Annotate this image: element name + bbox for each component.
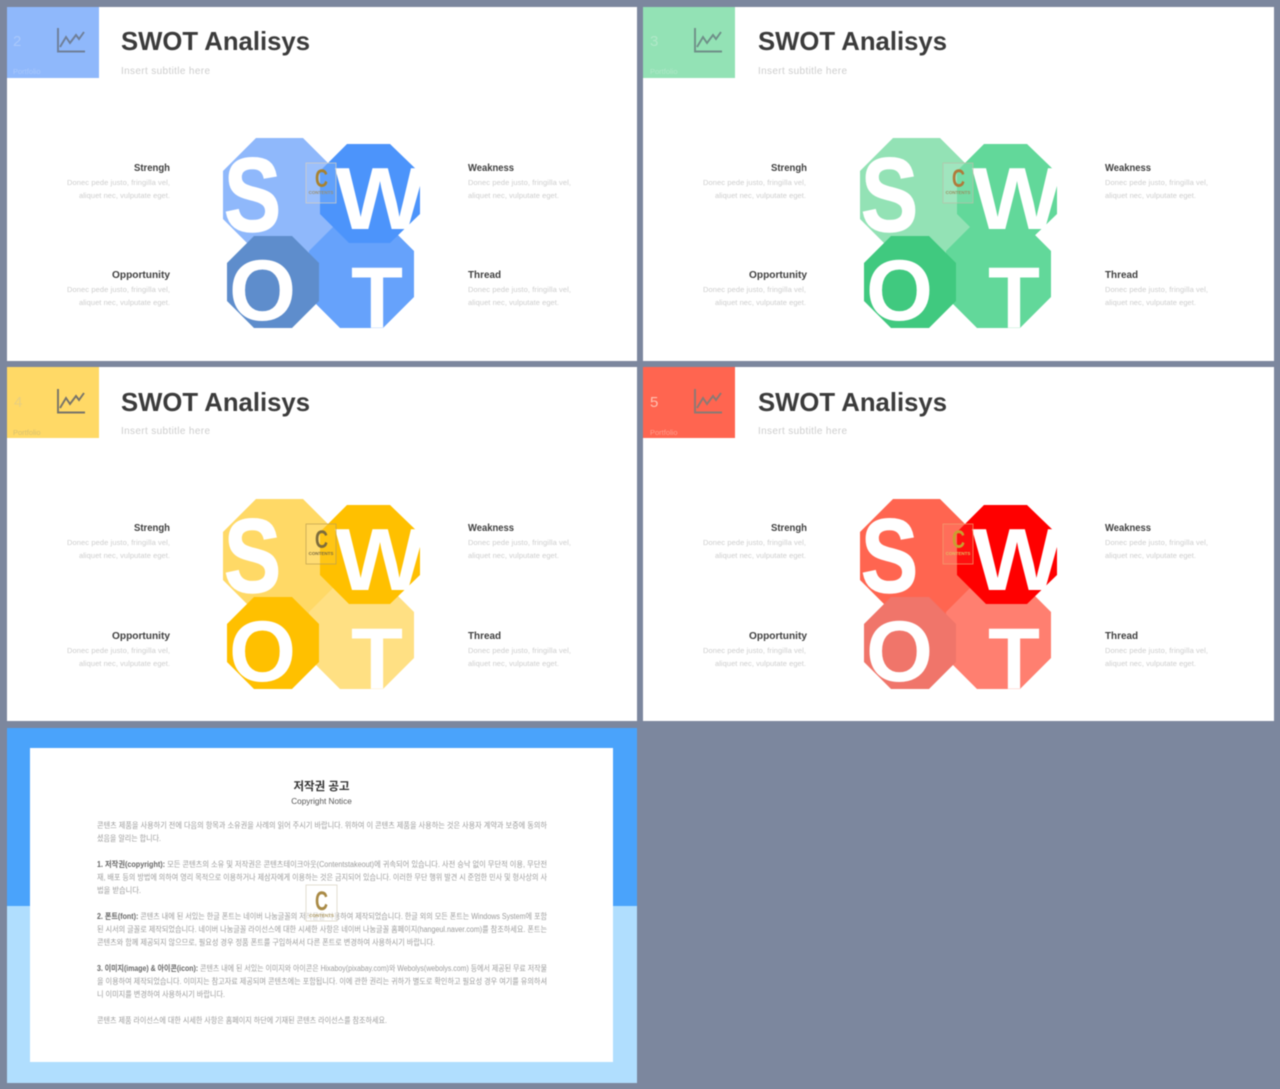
watermark logo: C — [952, 526, 965, 554]
diagram: SWOT octagons: O — [229, 243, 296, 339]
watermark logo: CONTENTS — [309, 551, 333, 556]
notice closing line: 콘텐츠 제품 라이선스에 대한 시세한 사항은 홈페이지 하단에 기재된 콘텐츠 라이선스를 참조하세요. — [97, 1015, 387, 1025]
header tab: green: Portfolio — [650, 67, 678, 76]
panel: yellow SWOT slide — [7, 367, 637, 721]
text block: Weakness: Weakness — [468, 523, 514, 534]
diagram: SWOT octagons: W — [335, 510, 425, 609]
header tab: blue — [7, 7, 99, 78]
notice section 2: font: 콘텐츠와 함께 제공되지 않으므로, 필요성 경우 정품 폰트를 구입하셔서 다른 폰트로 변경하여 사용하시기 바랍니다. — [97, 937, 435, 947]
title: SWOT Analisys — [758, 26, 947, 56]
watermark logo: C — [315, 526, 328, 554]
text block: Thread: aliquet nec, vulputate eget. — [468, 659, 559, 668]
text block: Thread — [1105, 631, 1208, 668]
diagram: SWOT octagons: W — [972, 149, 1062, 248]
watermark logo: C — [952, 165, 965, 193]
text block: Weakness: aliquet nec, vulputate eget. — [1105, 551, 1196, 560]
diagram: SWOT octagons: O — [229, 604, 296, 700]
watermark logo — [306, 163, 336, 203]
watermark logo: C — [315, 165, 328, 193]
text block: Weakness — [1105, 523, 1208, 560]
subtitle: Insert subtitle here — [121, 426, 210, 437]
panel: blue SWOT slide — [7, 7, 637, 361]
text block: Weakness: Weakness — [1105, 523, 1151, 534]
header tab: green: 3 — [650, 33, 658, 50]
text block: Weakness — [1105, 163, 1208, 200]
text block: Thread — [1105, 270, 1208, 307]
text block: Opportunity: aliquet nec, vulputate eget. — [79, 298, 170, 307]
text block: Thread: Thread — [1105, 631, 1138, 642]
notice section 1: copyright: 1. 저작권(copyright): 모든 콘텐츠의 소유 및 저작권은 콘텐츠테이크아웃(Contentstakeout)에 귀속되어 있습니다. 사전 승낙 없이 무단적 이용, 무단전 — [97, 859, 547, 869]
text block: Weakness: Donec pede justo, fringilla vel, — [1105, 538, 1208, 547]
text block: Opportunity: aliquet nec, vulputate eget. — [79, 659, 170, 668]
watermark logo — [306, 524, 336, 564]
header tab: yellow: 4 — [14, 394, 22, 411]
text block: Strengh: Strengh — [771, 163, 807, 174]
icon: line chart — [695, 28, 722, 52]
title: SWOT Analisys — [121, 387, 310, 417]
text block: Weakness: aliquet nec, vulputate eget. — [468, 551, 559, 560]
text block: Thread: Thread — [468, 270, 501, 281]
panel: copyright notice — [7, 728, 637, 1083]
header tab: yellow: Portfolio — [13, 428, 41, 437]
text block: Weakness — [468, 523, 571, 560]
header tab: red: Portfolio — [650, 428, 678, 437]
text block: Opportunity — [703, 631, 807, 668]
text block: Strengh: Donec pede justo, fringilla vel, — [703, 178, 806, 187]
text block: Thread: aliquet nec, vulputate eget. — [1105, 659, 1196, 668]
diagram: SWOT octagons: S — [861, 137, 918, 254]
diagram: SWOT octagons: T — [988, 250, 1040, 347]
header tab: red: 5 — [650, 394, 658, 411]
text block: Weakness: Donec pede justo, fringilla vel, — [468, 178, 571, 187]
notice intro paragraph: 콘텐츠 제품을 사용하기 전에 다음의 항목과 소유권을 사례의 읽어 주시기 바랍니다. 위하여 이 콘텐츠 제품을 사용하는 것은 사용자 계약과 보증에 동의하 — [97, 820, 548, 830]
header tab: green — [643, 7, 735, 78]
text block: Strengh: Donec pede justo, fringilla vel, — [703, 538, 806, 547]
text block: Opportunity: aliquet nec, vulputate eget. — [715, 298, 806, 307]
header tab: blue: Portfolio — [13, 67, 41, 76]
diagram: SWOT octagons: W — [972, 510, 1062, 609]
text block: Strengh: Donec pede justo, fringilla vel, — [67, 178, 170, 187]
panel: red SWOT slide — [643, 367, 1274, 721]
diagram: SWOT octagons — [223, 137, 425, 347]
diagram: SWOT octagons: T — [351, 611, 403, 708]
text block: Thread: Donec pede justo, fringilla vel, — [468, 285, 571, 294]
diagram: SWOT octagons — [860, 137, 1062, 347]
notice section 2: font: 2. 폰트(font): 콘텐츠 내에 된 서있는 한글 폰트는 네이버 나눔글꼴의 저작물을 사용하여 제작되었습니다. 한글 외의 모든 폰트는 Windows System에 포함 — [97, 911, 548, 921]
text block: Strengh — [703, 523, 807, 560]
text block: Strengh: Donec pede justo, fringilla vel, — [67, 538, 170, 547]
subtitle: Insert subtitle here — [758, 426, 847, 437]
text block: Thread: aliquet nec, vulputate eget. — [468, 298, 559, 307]
watermark logo — [943, 524, 973, 564]
diagram: SWOT octagons: O — [866, 604, 933, 700]
text block: Thread: aliquet nec, vulputate eget. — [1105, 298, 1196, 307]
header tab: yellow — [7, 367, 99, 438]
text block: Strengh: aliquet nec, vulputate eget. — [79, 191, 170, 200]
text block: Weakness: aliquet nec, vulputate eget. — [468, 191, 559, 200]
header tab: blue: 2 — [13, 33, 21, 50]
text block: Strengh: Strengh — [771, 523, 807, 534]
text block: Opportunity: Opportunity — [749, 270, 807, 281]
text block: Strengh: aliquet nec, vulputate eget. — [715, 551, 806, 560]
notice section 3: image and icon — [97, 963, 547, 999]
diagram: SWOT octagons — [223, 498, 425, 708]
notice section 1: copyright: 재, 배포 등의 방법에 의하여 영리 목적으로 이용하거나 제삼자에게 이용하는 것은 금지되어 있습니다. 이러한 무단 행위 발견 시 준엄한 민사 및 형사상의 사 — [97, 872, 548, 882]
text block: Strengh — [703, 163, 807, 200]
watermark logo: CONTENTS — [309, 190, 333, 195]
text block: Thread — [468, 631, 571, 668]
notice section 3: image and icon: 을 이용하여 제작되었습니다. 이미지는 참고자료 제공되며 콘텐츠에는 포함됩니다. 이에 관한 권리는 귀하가 별도로 확인하고 필요성 경우 여기를 유의하셔 — [97, 976, 547, 986]
diagram: SWOT octagons: W — [335, 149, 425, 248]
notice section 2: font: 된 시서의 글꼴로 제작되었습니다. 네이버 나눔글꼴 라이선스에 대한 시세한 사항은 네이버 나눔글꼴 홈페이지(hangeul.naver.com)를 참조하세요. 폰트는 — [97, 924, 547, 934]
diagram: SWOT octagons: O — [866, 243, 933, 339]
diagram: SWOT octagons: S — [224, 137, 281, 254]
text block: Strengh: aliquet nec, vulputate eget. — [79, 551, 170, 560]
panel: green SWOT slide — [643, 7, 1274, 361]
diagram: SWOT octagons — [860, 498, 1062, 708]
notice section 1: copyright: 법을 받습니다. — [97, 885, 141, 895]
diagram: SWOT octagons: S — [224, 498, 281, 615]
icon: line chart — [58, 28, 85, 52]
text block: Opportunity — [67, 631, 170, 668]
text block: Opportunity: Opportunity — [112, 631, 170, 642]
text block: Weakness: Weakness — [1105, 163, 1151, 174]
text block: Weakness — [468, 163, 571, 200]
text block: Opportunity: Opportunity — [112, 270, 170, 281]
notice section 1: copyright — [97, 859, 548, 895]
watermark logo: C — [315, 886, 328, 916]
header tab: red — [643, 367, 735, 438]
text block: Thread: Donec pede justo, fringilla vel, — [1105, 285, 1208, 294]
watermark logo: CONTENTS — [946, 551, 970, 556]
diagram: SWOT octagons: T — [988, 611, 1040, 708]
text block: Opportunity: Donec pede justo, fringilla vel, — [703, 285, 806, 294]
text block: Opportunity: aliquet nec, vulputate eget. — [715, 659, 806, 668]
text block: Weakness: Donec pede justo, fringilla vel, — [468, 538, 571, 547]
text block: Thread — [468, 270, 571, 307]
text block: Weakness: Weakness — [468, 163, 514, 174]
diagram: SWOT octagons: T — [351, 250, 403, 347]
notice intro paragraph: 셨음을 알리는 합니다. — [97, 833, 161, 843]
subtitle: Insert subtitle here — [121, 66, 210, 77]
watermark logo — [943, 163, 973, 203]
notice subheading: Copyright Notice — [291, 797, 352, 806]
notice section 2: font — [97, 911, 548, 947]
icon: line chart — [58, 389, 85, 412]
text block: Strengh: aliquet nec, vulputate eget. — [715, 191, 806, 200]
text block: Strengh: Strengh — [134, 163, 170, 174]
notice section 3: image and icon: 니 이미지를 변경하여 사용하시기 바랍니다. — [97, 989, 225, 999]
text block: Opportunity: Donec pede justo, fringilla vel, — [67, 646, 170, 655]
text block: Weakness: Donec pede justo, fringilla vel, — [1105, 178, 1208, 187]
text block: Opportunity: Donec pede justo, fringilla vel, — [703, 646, 806, 655]
text block: Thread: Thread — [1105, 270, 1138, 281]
text block: Weakness: aliquet nec, vulputate eget. — [1105, 191, 1196, 200]
text block: Strengh — [67, 523, 170, 560]
text block: Opportunity: Donec pede justo, fringilla vel, — [67, 285, 170, 294]
text block: Thread: Donec pede justo, fringilla vel, — [468, 646, 571, 655]
text block: Strengh — [67, 163, 170, 200]
text block: Opportunity — [67, 270, 170, 307]
title: SWOT Analisys — [758, 387, 947, 417]
watermark logo: CONTENTS — [309, 913, 334, 918]
diagram: SWOT octagons: S — [861, 498, 918, 615]
notice heading: 저작권 공고 — [293, 779, 350, 793]
watermark logo — [306, 885, 337, 921]
icon: line chart — [695, 389, 722, 412]
notice intro paragraph — [97, 820, 548, 843]
text block: Opportunity — [703, 270, 807, 307]
text block: Strengh: Strengh — [134, 523, 170, 534]
text block: Thread: Donec pede justo, fringilla vel, — [1105, 646, 1208, 655]
notice section 3: image and icon: 3. 이미지(image) & 아이콘(icon): 콘텐츠 내에 된 서있는 이미지와 아이콘은 Hixaboy(pixabay.com)와 Webolys(webolys.com) 등에서 제공된 무료 저작물 — [97, 963, 547, 973]
text block: Opportunity: Opportunity — [749, 631, 807, 642]
text block: Thread: Thread — [468, 631, 501, 642]
subtitle: Insert subtitle here — [758, 66, 847, 77]
title: SWOT Analisys — [121, 26, 310, 56]
watermark logo: CONTENTS — [946, 190, 970, 195]
